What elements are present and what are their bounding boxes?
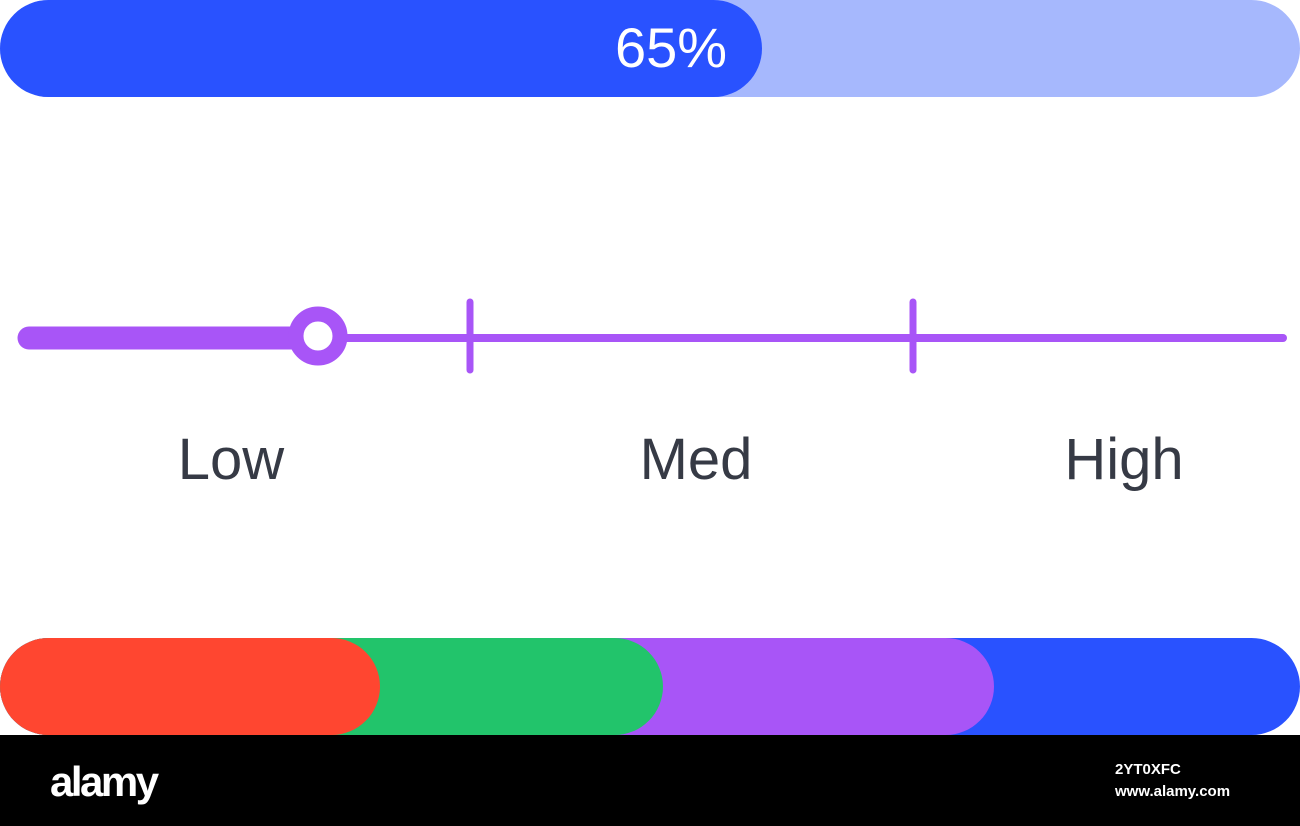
footer watermark bar [0, 735, 1300, 826]
website text: www.alamy.com [1115, 783, 1230, 800]
slider knob [296, 314, 340, 358]
percentage label: 65% [615, 16, 727, 79]
tick marks [470, 302, 913, 370]
segment: red [0, 638, 380, 735]
segment: blue [0, 638, 1300, 735]
progress fill [0, 0, 762, 97]
slider: low/med/high [18, 298, 1287, 374]
slider track [22, 334, 1283, 342]
image id text: 2YT0XFC [1115, 761, 1181, 778]
segmented color bar [0, 638, 1300, 735]
label: Med: Med [640, 427, 752, 492]
alamy logo text: alamy [50, 758, 157, 805]
label: High: High [1064, 427, 1184, 492]
progress bar: 65% [0, 0, 1300, 97]
segment: purple [0, 638, 994, 735]
label: Low: Low [178, 427, 284, 492]
segment: green [0, 638, 663, 735]
labels [178, 427, 1184, 492]
